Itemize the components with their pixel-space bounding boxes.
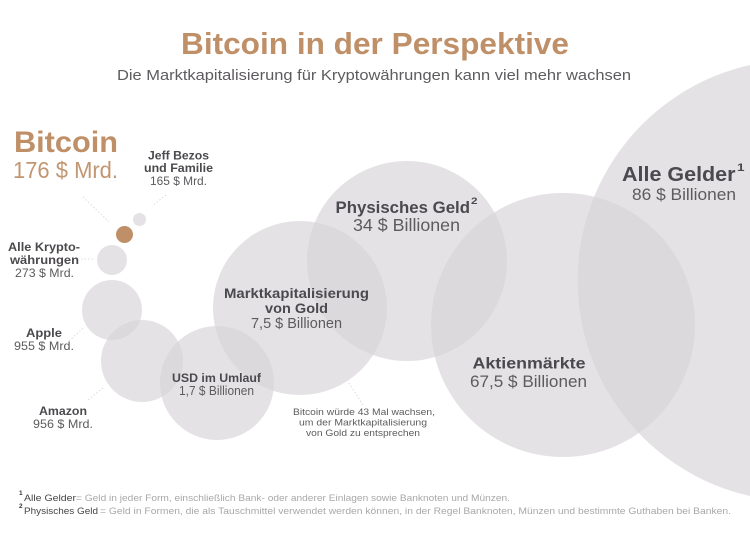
bubble: Physisches Geld <box>307 161 507 361</box>
bubble: Alle Kryptowährungen <box>97 245 127 275</box>
label: Apple: Apple <box>26 326 62 340</box>
label: USD im Umlauf: 1,7 $ Billionen <box>179 384 254 398</box>
footnote 2: = Geld in Formen, die als Tauschmittel verwendet werden können, in der Regel Banknoten, Münzen und bestimmte Guthaben bei Banken. <box>100 506 731 517</box>
label: Jeff Bezos: Jeff Bezos <box>148 148 209 162</box>
label: Amazon: Amazon <box>39 404 87 418</box>
label: Alle Kryptowährungen: Alle Krypto- <box>8 240 80 254</box>
label: Aktienmärkte: Aktienmärkte <box>472 356 586 372</box>
label: Jeff Bezos: 165 $ Mrd. <box>150 174 207 188</box>
footnote 1: = Geld in jeder Form, einschließlich Bank- oder anderer Einlagen sowie Banknoten und Münzen. <box>76 493 510 504</box>
label: Alle Kryptowährungen <box>8 240 80 280</box>
footnote 1: Alle Gelder <box>24 493 76 504</box>
label: Marktkapitalisierung von Gold <box>224 285 369 332</box>
callout: Bitcoin growth: um der Marktkapitalisierung <box>299 418 427 428</box>
label: Alle Kryptowährungen: 273 $ Mrd. <box>15 266 74 280</box>
label: USD im Umlauf: USD im Umlauf <box>172 371 262 385</box>
label: Physisches Geld <box>336 196 478 235</box>
label: Bitcoin: Bitcoin <box>14 126 118 159</box>
bubble: USD im Umlauf <box>160 326 274 440</box>
label: Marktkapitalisierung von Gold: Marktkapitalisierung <box>224 285 369 301</box>
footnote 2: Physisches Geld <box>24 506 98 517</box>
bubble: Marktkapitalisierung von Gold <box>213 221 387 395</box>
callout: Bitcoin growth: von Gold zu entsprechen <box>306 428 420 439</box>
callout: Bitcoin growth <box>293 407 435 439</box>
label: Apple <box>14 326 74 353</box>
label: Amazon: 956 $ Mrd. <box>33 417 93 431</box>
label: Amazon <box>33 404 93 431</box>
title: Bitcoin in der Perspektive <box>181 26 569 61</box>
label: Apple: 955 $ Mrd. <box>14 339 74 353</box>
label: USD im Umlauf <box>172 371 262 398</box>
label: Marktkapitalisierung von Gold: von Gold <box>265 300 328 316</box>
bubble: Bitcoin <box>116 226 133 243</box>
bubble: Alle Gelder <box>578 60 750 501</box>
bubble: Apple <box>82 280 142 340</box>
label: Bitcoin <box>13 126 118 183</box>
label: Jeff Bezos: und Familie <box>144 161 213 175</box>
callout: Bitcoin growth: Bitcoin würde 43 Mal wachsen, <box>293 407 435 418</box>
label: Physisches Geld: 2 <box>471 196 478 207</box>
footnote 2: 2 <box>19 503 23 510</box>
footnote 2 <box>19 503 731 517</box>
label: Alle Gelder: 86 $ Billionen <box>632 185 736 204</box>
bubble: Amazon <box>101 320 183 402</box>
bubble: Aktienmärkte <box>431 193 695 457</box>
footnote 1 <box>19 490 510 504</box>
label: Aktienmärkte: 67,5 $ Billionen <box>470 373 587 391</box>
bubble: Jeff Bezos und Familie <box>133 213 146 226</box>
subtitle: Die Marktkapitalisierung für Kryptowährungen kann viel mehr wachsen <box>117 67 631 84</box>
label: Physisches Geld: Physisches Geld <box>336 198 470 217</box>
label: Marktkapitalisierung von Gold: 7,5 $ Billionen <box>251 316 342 332</box>
footnote 1: 1 <box>19 490 23 497</box>
label: Alle Gelder <box>622 162 744 204</box>
label: Alle Gelder: 1 <box>737 162 744 174</box>
label: Alle Gelder: Alle Gelder <box>622 163 736 186</box>
label: Alle Kryptowährungen: währungen <box>9 253 79 267</box>
label: Physisches Geld: 34 $ Billionen <box>353 215 460 235</box>
label: Jeff Bezos <box>144 148 213 188</box>
label: Aktienmärkte <box>470 356 587 391</box>
label: Bitcoin: 176 $ Mrd. <box>13 157 118 183</box>
